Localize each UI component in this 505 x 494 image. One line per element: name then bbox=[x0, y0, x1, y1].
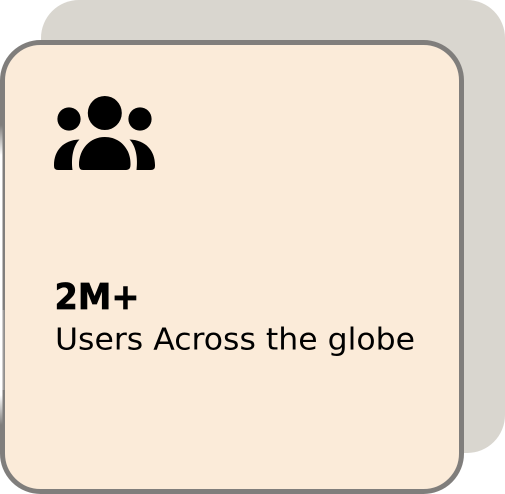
stat value: 2M+ bbox=[54, 277, 140, 318]
stat description: Users Across the globe bbox=[55, 322, 415, 358]
icon: group of three users bbox=[54, 96, 155, 170]
